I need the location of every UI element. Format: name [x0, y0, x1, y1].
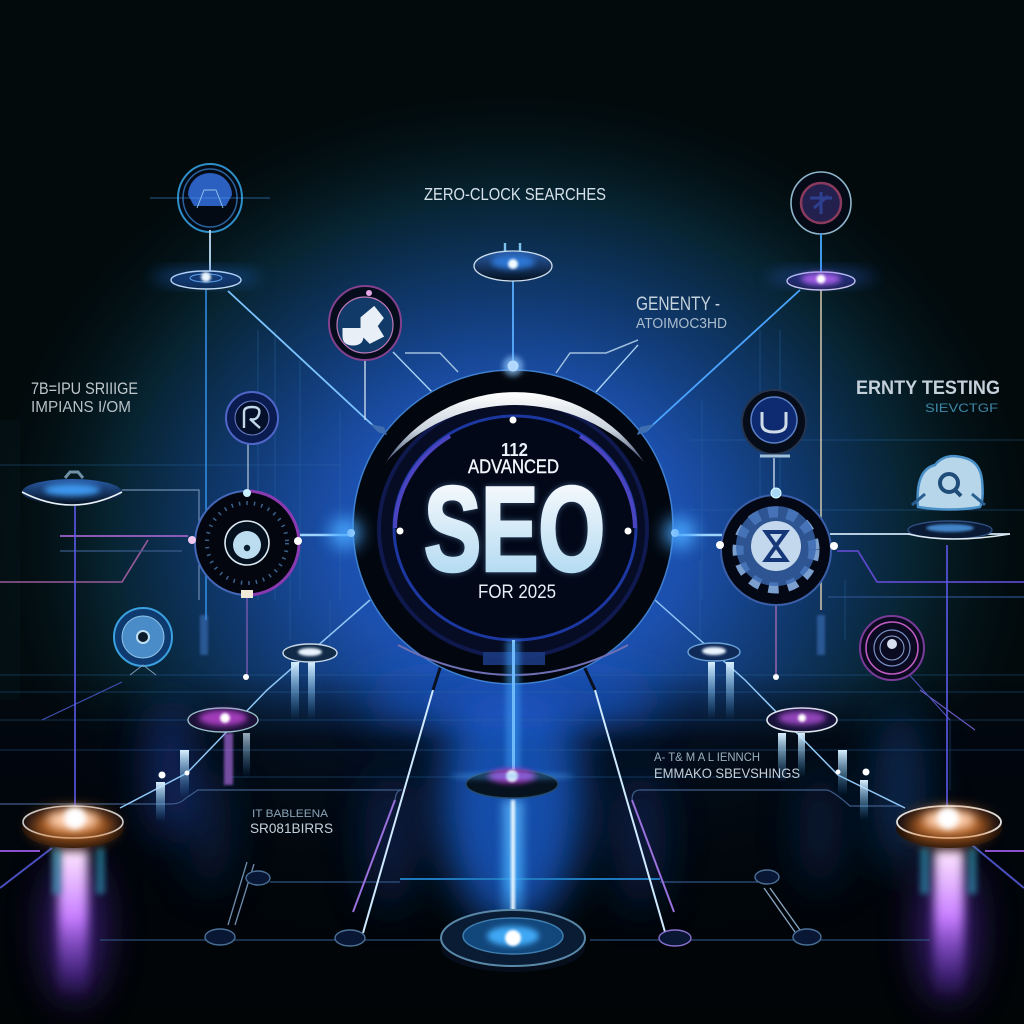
hub inner screen — [394, 416, 636, 640]
label: left top: 7B=IPU SRIIIGE — [31, 379, 138, 398]
hub sparkles and vertical beam — [329, 356, 696, 920]
icon: search cloud — [912, 456, 985, 510]
label: left top: IMPIANS I/OM — [31, 399, 131, 416]
platform: small left — [283, 644, 337, 662]
label: bottom right — [654, 750, 800, 781]
platform: right — [908, 521, 1010, 539]
platform: top-center — [474, 243, 552, 281]
light bars under small platforms — [156, 615, 868, 822]
connector lines to hub — [75, 280, 1010, 933]
label: entity testing: SIEVCTGF — [925, 401, 998, 415]
hub title advanced: ADVANCED — [468, 456, 559, 478]
label: left top — [31, 379, 138, 416]
label: generative snippet: GENENTY - — [636, 294, 720, 315]
label: entity testing — [856, 378, 1000, 415]
label: bottom right: EMMAKO SBEVSHINGS — [654, 765, 800, 781]
hub blue band — [379, 401, 647, 657]
icon: R ring — [226, 392, 278, 444]
label: bottom right: A- T& M A L IENNCH — [654, 750, 760, 764]
icon: gear dial — [716, 488, 838, 605]
icon: top-right ring — [791, 172, 851, 272]
label: generative snippet: ATOIMOC3HD — [636, 315, 727, 332]
hub outer ring — [353, 370, 673, 684]
label: zero-click searches: ZERO-CLOCK SEARCHES — [424, 184, 606, 204]
icon: purple rings — [860, 616, 924, 680]
platform: left — [22, 472, 122, 505]
hub bottom rim highlight — [398, 645, 628, 675]
icon: top-left ring — [150, 164, 270, 272]
label: bottom left: SR081BIRRS — [250, 820, 333, 836]
hub white arc — [386, 392, 644, 462]
label: bottom left — [250, 808, 333, 836]
icon: small eye ring — [114, 608, 172, 675]
nodes: small floor rings — [205, 870, 821, 946]
nodes: glowing junction dots — [158, 674, 870, 778]
hub title count: 112 — [501, 440, 528, 460]
panel: central SEO hub — [353, 370, 673, 684]
platform: magenta right — [767, 708, 837, 732]
label: generative snippet — [636, 294, 727, 332]
platform: orange left — [22, 790, 124, 1000]
icon: U ring — [742, 390, 806, 456]
circuit grid lines — [0, 290, 1024, 940]
platform: top-left — [151, 271, 261, 289]
hub subtitle: FOR 2025 — [478, 582, 556, 603]
floor glow patches — [49, 672, 974, 1000]
icon: magenta logo ring — [329, 286, 401, 360]
platform: bottom center — [441, 910, 585, 972]
platform: orange right — [896, 790, 1002, 1000]
platform: magenta left — [188, 708, 258, 732]
label: bottom left: IT BABLEENA — [252, 808, 329, 820]
hub base plate — [483, 652, 545, 665]
icon: left dial — [188, 489, 302, 598]
hub title SEO: SEO — [424, 462, 605, 596]
platform: small right — [688, 643, 740, 661]
platform: center magenta — [450, 769, 574, 798]
label: entity testing: ERNTY TESTING — [856, 378, 1000, 399]
hub title SEO glow: SEO — [424, 462, 605, 596]
platform: top-right — [766, 272, 876, 290]
